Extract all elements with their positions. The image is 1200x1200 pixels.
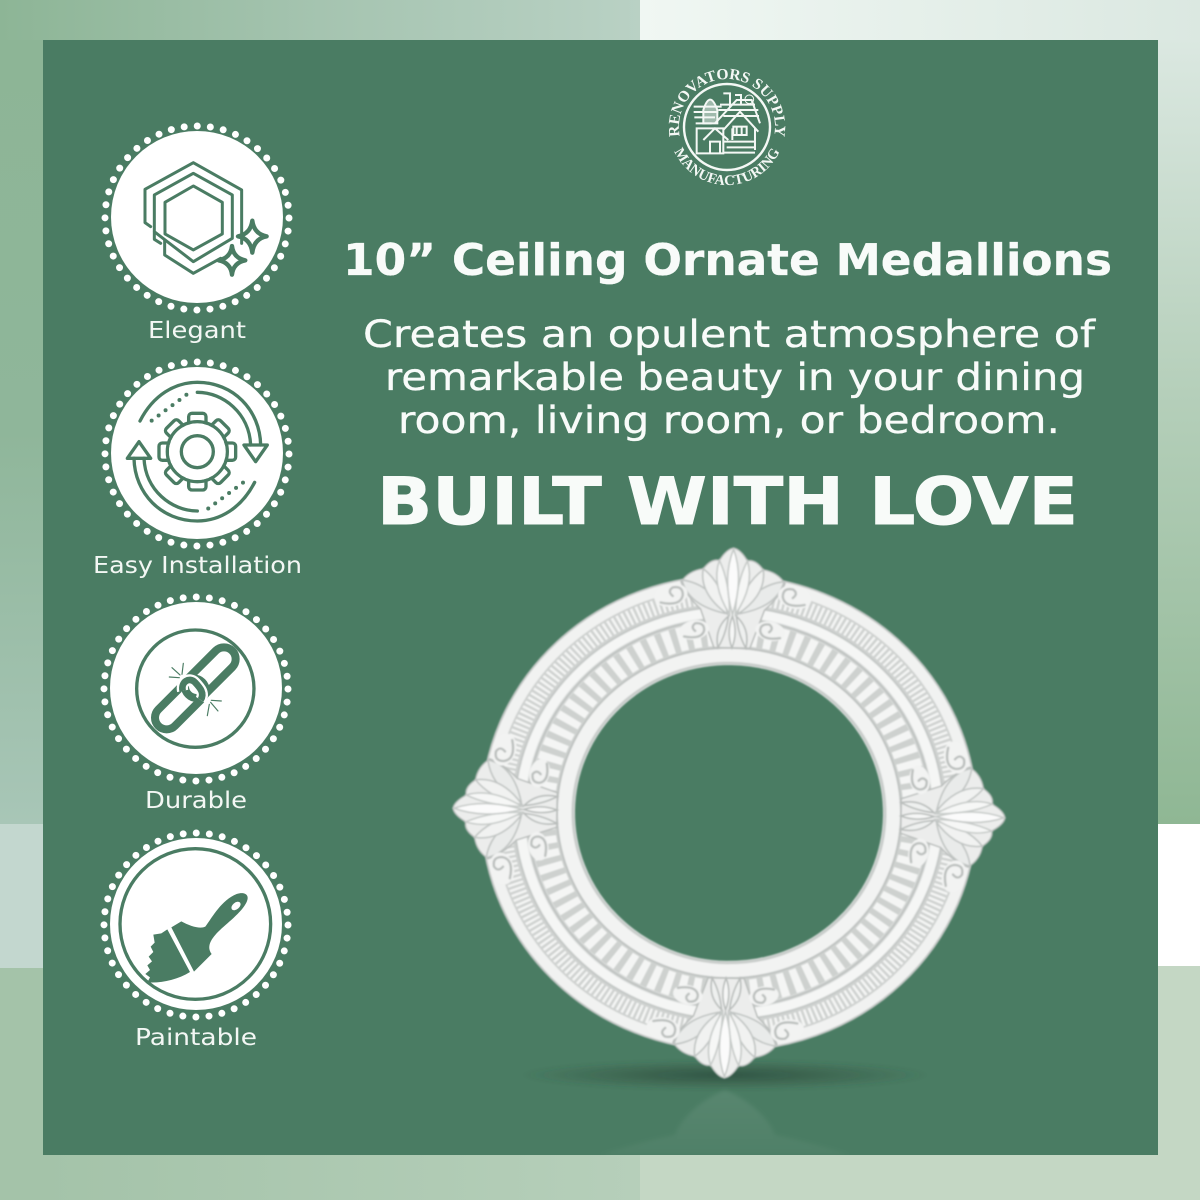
label: easy installation: Easy Installation — [93, 553, 302, 579]
logo: Renovators Supply Manufacturing — [668, 68, 786, 186]
icon: nested hexagons with sparkles — [145, 163, 267, 275]
text block: description: room, living room, or bedroom. — [398, 399, 1060, 442]
feature: durable — [104, 597, 288, 781]
icon: chain link in ring — [137, 630, 254, 747]
label: paintable: Paintable — [135, 1025, 257, 1051]
heading: built with love: BUILT WITH LOVE — [377, 465, 1078, 540]
feature: easy installation — [105, 362, 289, 546]
label: durable: Durable — [145, 788, 247, 814]
text block: description — [363, 313, 1096, 442]
ornament: bottom leaf fan — [643, 977, 808, 1079]
text block: description: remarkable beauty in your dining — [385, 356, 1085, 399]
text block: description: Creates an opulent atmosphere of — [363, 313, 1096, 356]
heading: product title: 10” Ceiling Ornate Medallions — [343, 235, 1112, 286]
ornament: right leaf fan — [900, 738, 1006, 896]
ornament: left leaf fan — [452, 730, 558, 888]
ornament: top leaf fan — [650, 547, 815, 649]
icon: paint brush in ring — [120, 849, 271, 999]
logo: Renovators Supply Manufacturing: RENOVATORS SUPPLY — [668, 68, 786, 137]
feature: elegant — [105, 126, 289, 310]
icon: gear with circular arrows — [127, 382, 267, 521]
logo: Renovators Supply Manufacturing: MANUFACTURING — [674, 146, 779, 186]
label: elegant: Elegant — [148, 318, 246, 344]
feature: paintable — [104, 833, 288, 1017]
floor reflection of medallion — [600, 1090, 850, 1155]
floor shadow under medallion — [520, 1060, 930, 1090]
medallion: ornate ceiling ring — [448, 543, 1010, 1083]
